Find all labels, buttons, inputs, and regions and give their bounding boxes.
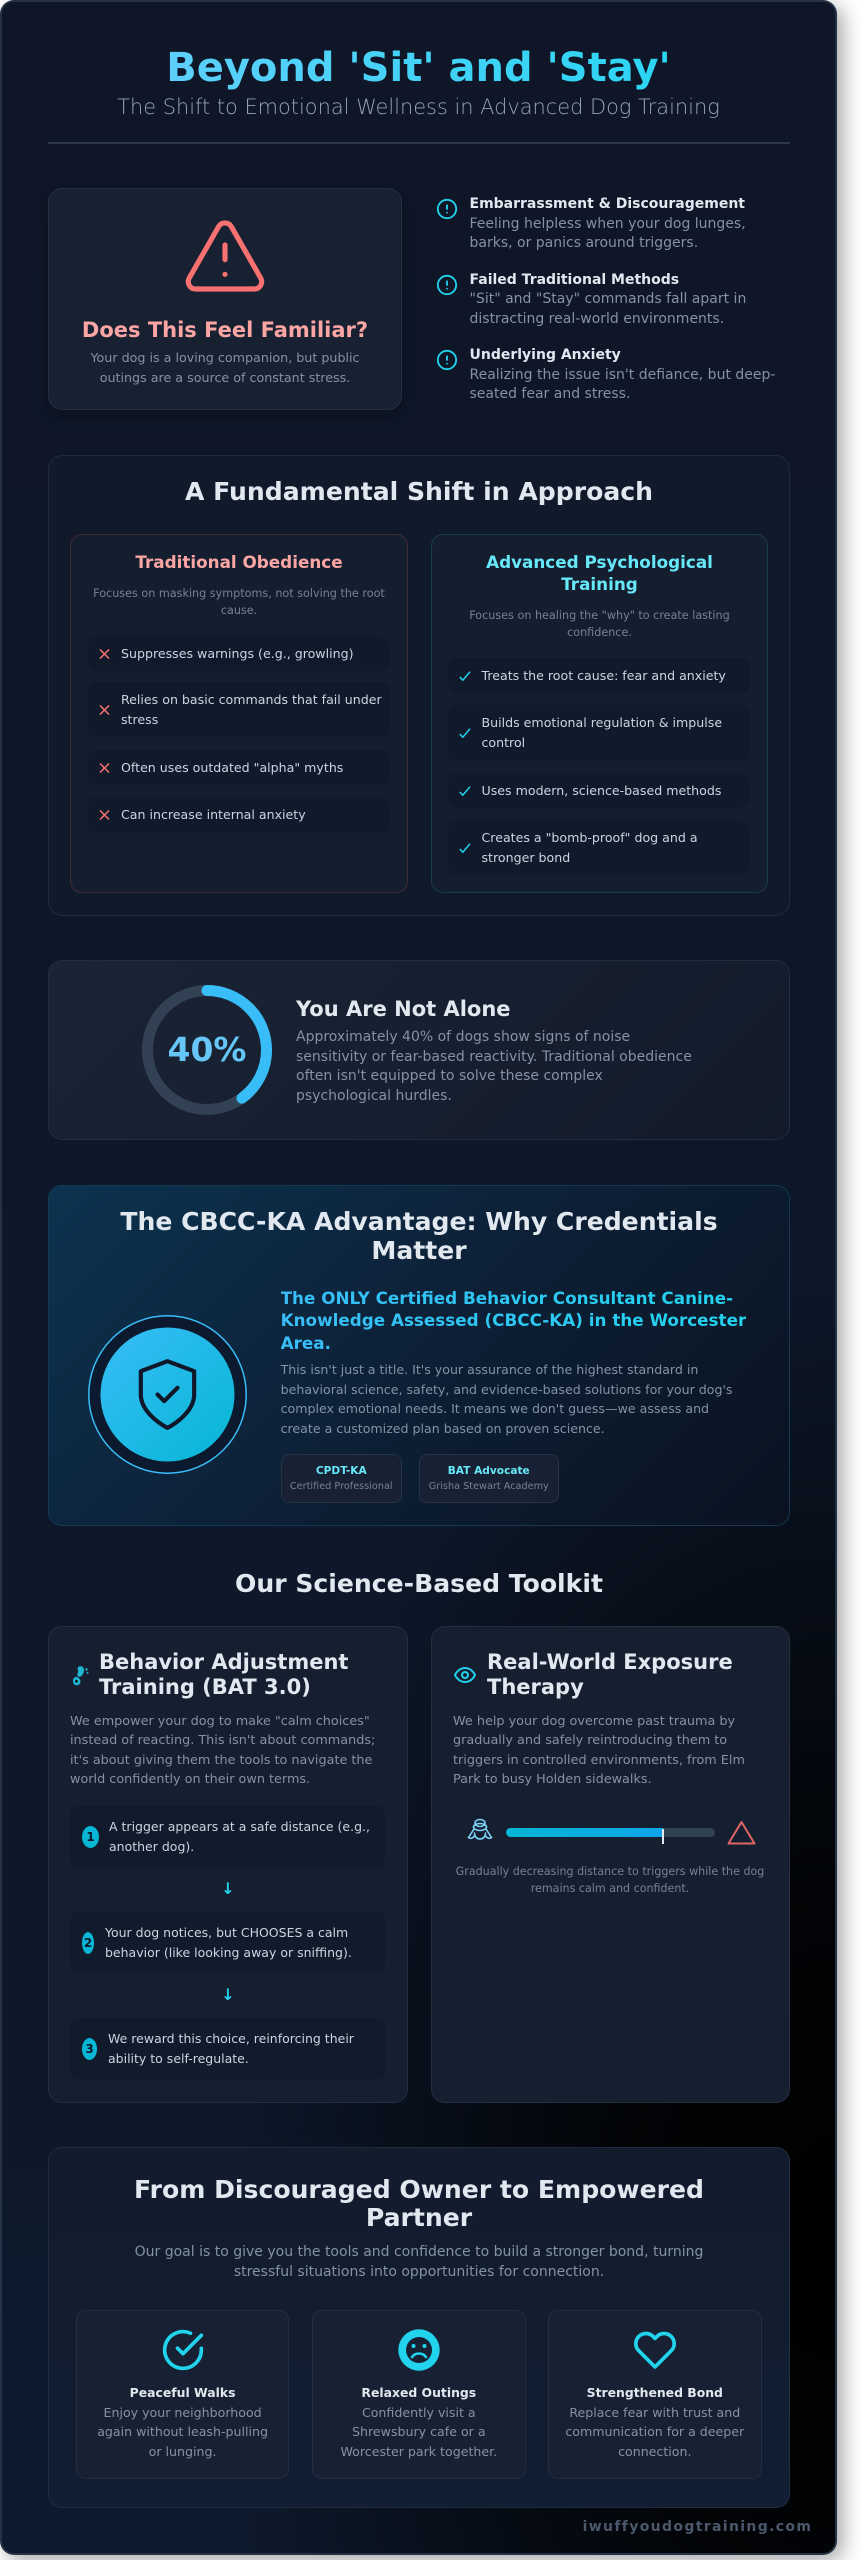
step 3: 3 — [85, 2042, 94, 2056]
heading: Matter — [371, 1236, 467, 1264]
heading — [487, 1650, 733, 1698]
item: Uses modern, science-based methods — [482, 783, 721, 798]
step 3: ability to self-regulate. — [108, 2050, 249, 2066]
item: Treats the root cause: fear and anxiety — [482, 668, 726, 683]
heading: Advanced Psychological — [486, 552, 713, 572]
item: Builds emotional regulation & impulse — [482, 715, 722, 730]
heading: The CBCC-KA Advantage: Why Credentials — [120, 1207, 718, 1236]
badge: BAT Advocate — [419, 1454, 558, 1503]
step 2: 2 — [84, 1936, 92, 1950]
heading: You Are Not Alone — [296, 997, 511, 1021]
step 2: Your dog notices, but CHOOSES a calm — [105, 1925, 348, 1940]
subtitle: The Shift to Emotional Wellness in Advanced Dog Training — [117, 95, 720, 119]
item — [88, 636, 389, 671]
point: anxiety: Underlying Anxiety — [470, 347, 621, 363]
item: Suppresses warnings (e.g., growling) — [121, 646, 354, 661]
heading: Partner — [366, 2203, 472, 2232]
panel: CBCC-KA advantage — [48, 1185, 790, 1526]
text block: triggers in controlled environments, from Elm — [453, 1752, 745, 1768]
subheading: Area. — [281, 1332, 331, 1352]
step 3 — [70, 2018, 384, 2079]
text block: Our goal is to give you the tools and confidence to build a stronger bond, turning — [135, 2244, 703, 2260]
badge: BAT Advocate: BAT Advocate — [448, 1465, 530, 1477]
heading: Training — [561, 574, 638, 594]
text block: We empower your dog to make "calm choices" — [70, 1714, 370, 1728]
item — [88, 750, 389, 785]
text block: Worcester park together. — [340, 2444, 497, 2459]
text block: world confidently on their own terms. — [70, 1772, 310, 1787]
text block: Approximately 40% of dogs show signs of noise — [296, 1029, 630, 1045]
subheading: Knowledge Assessed (CBCC-KA) in the Worcester — [281, 1310, 746, 1330]
icon: trigger triangle — [728, 1821, 756, 1844]
point: anxiety: Realizing the issue isn't defiance, but deep- — [470, 367, 775, 383]
panel: fundamental shift — [48, 455, 790, 916]
progress fill — [506, 1828, 662, 1837]
point: embarrassment: Embarrassment & Discouragement — [470, 196, 745, 212]
text block: or lunging. — [149, 2444, 216, 2459]
item: Often uses outdated "alpha" myths — [121, 760, 343, 775]
subheading — [281, 1286, 746, 1354]
icon: face — [398, 2329, 440, 2371]
text block — [90, 350, 360, 385]
item — [88, 682, 389, 737]
text block: instead of reacting. This isn't about commands; — [70, 1733, 375, 1748]
heading: From Discouraged Owner to Empowered — [134, 2175, 704, 2204]
badge: BAT Advocate: Grisha Stewart Academy — [429, 1481, 549, 1492]
text block: confidence. — [567, 626, 632, 638]
point: failed methods: "Sit" and "Stay" commands fall apart in — [470, 291, 746, 307]
icon: check circle — [162, 2330, 204, 2370]
footer url: iwuffyoudogtraining.com — [583, 2519, 812, 2535]
arrow: ↓ — [221, 1985, 235, 2004]
text block: Strengthened Bond — [587, 2385, 723, 2400]
text block: This isn't just a title. It's your assurance of the highest standard in — [281, 1362, 698, 1377]
text block: Enjoy your neighborhood — [104, 2405, 262, 2420]
point: embarrassment — [470, 196, 746, 251]
card: peaceful walks — [76, 2310, 289, 2479]
badge: CPDT-KA — [281, 1454, 402, 1503]
heading: Therapy — [487, 1674, 584, 1698]
item — [448, 820, 748, 875]
panel: real-world exposure therapy — [430, 1626, 790, 2102]
step 1: A trigger appears at a safe distance (e.g., — [109, 1819, 370, 1834]
step 1: another dog). — [109, 1839, 194, 1854]
icon: heart — [634, 2332, 676, 2369]
progress track — [506, 1828, 715, 1837]
text block — [135, 2244, 703, 2280]
panel: empowered partner — [48, 2147, 790, 2508]
text block: Focuses on masking symptoms, not solving the root — [93, 586, 385, 600]
panel: traditional obedience — [70, 534, 408, 893]
icon: alert — [436, 350, 458, 370]
item: Relies on basic commands that fail under — [121, 692, 382, 707]
title: Beyond 'Sit' and 'Stay' — [166, 45, 671, 91]
panel: does this feel familiar — [48, 188, 402, 410]
text block: it's about giving them the tools to navigate the — [70, 1752, 372, 1768]
text block: communication for a deeper — [565, 2424, 744, 2439]
text block: cause. — [221, 604, 257, 616]
text block: We help your dog overcome past trauma by — [453, 1714, 735, 1728]
icon: eye — [454, 1667, 476, 1683]
badge: CPDT-KA: CPDT-KA — [316, 1465, 367, 1477]
panel: you are not alone — [48, 960, 790, 1140]
chart: 40 percent ring: 40% — [168, 1030, 246, 1069]
caption: remains calm and confident. — [531, 1882, 689, 1894]
text block: Focuses on healing the "why" to create lasting — [469, 608, 730, 622]
icon: warning triangle — [186, 220, 264, 292]
chart: 40 percent ring — [142, 985, 272, 1115]
heading — [134, 2175, 704, 2232]
card: relaxed outings — [312, 2310, 526, 2479]
text block: behavioral science, safety, and evidence-based solutions for your dog's — [281, 1382, 732, 1397]
item — [448, 658, 748, 693]
step 2: behavior (like looking away or sniffing). — [105, 1944, 352, 1960]
step 1: 1 — [86, 1830, 95, 1844]
text block: Park to busy Holden sidewalks. — [453, 1772, 652, 1787]
heading: toolkit: Our Science-Based Toolkit — [235, 1569, 603, 1598]
panel: behavior adjustment training — [48, 1626, 408, 2102]
text block: psychological hurdles. — [296, 1088, 452, 1104]
text block: gradually and safely reintroducing them to — [453, 1733, 727, 1748]
heading: Real-World Exposure — [487, 1650, 733, 1674]
text block — [70, 1714, 375, 1787]
point: failed methods: distracting real-world environments. — [470, 311, 724, 327]
text block: Shrewsbury cafe or a — [352, 2424, 486, 2439]
marker — [662, 1829, 664, 1844]
item: Can increase internal anxiety — [121, 807, 306, 822]
text block — [340, 2385, 497, 2459]
step 2 — [70, 1912, 384, 1973]
icon: alert — [436, 198, 458, 220]
step 1 — [70, 1806, 384, 1867]
text block: Replace fear with trust and — [569, 2405, 740, 2420]
icon: paw steps — [73, 1666, 88, 1686]
heading: A Fundamental Shift in Approach — [185, 477, 653, 506]
text block — [296, 1029, 692, 1104]
heading: Does This Feel Familiar? — [82, 318, 368, 342]
text block: stressful situations into opportunities for connection. — [234, 2264, 604, 2280]
text block — [565, 2385, 744, 2459]
caption — [456, 1865, 764, 1894]
text block: outings are a source of constant stress. — [100, 370, 350, 385]
diagram: distance slider — [468, 1818, 756, 1844]
text block: complex emotional needs. It means we don't guess—we assess and — [281, 1401, 709, 1416]
point: failed methods — [470, 272, 746, 327]
heading — [99, 1650, 348, 1698]
item: Creates a "bomb-proof" dog and a — [482, 830, 698, 845]
item — [88, 797, 389, 833]
text block: create a customized plan based on proven science. — [281, 1421, 605, 1436]
heading: Traditional Obedience — [135, 552, 343, 572]
text block: again without leash-pulling — [97, 2424, 268, 2439]
icon: alert — [436, 274, 458, 296]
heading — [486, 552, 713, 594]
text block: Relaxed Outings — [361, 2385, 476, 2400]
text block — [453, 1714, 745, 1787]
heading: Behavior Adjustment — [99, 1650, 348, 1674]
list: pain points — [436, 196, 775, 402]
text block — [280, 1362, 732, 1436]
heading: Training (BAT 3.0) — [99, 1674, 311, 1698]
item: stress — [121, 712, 158, 726]
caption: Gradually decreasing distance to triggers while the dog — [456, 1865, 764, 1878]
text block: Your dog is a loving companion, but public — [90, 350, 360, 365]
icon: shield badge — [88, 1315, 247, 1474]
text block: Confidently visit a — [362, 2405, 476, 2420]
arrow: ↓ — [221, 1879, 235, 1898]
item: control — [482, 735, 525, 750]
point: anxiety: seated fear and stress. — [470, 386, 630, 402]
panel: advanced psychological training — [431, 534, 768, 893]
card: strengthened bond — [548, 2310, 762, 2479]
text block: often isn't equipped to solve these complex — [296, 1068, 603, 1084]
text block — [469, 608, 730, 638]
step 3: We reward this choice, reinforcing their — [108, 2031, 354, 2046]
subheading: The ONLY Certified Behavior Consultant Canine- — [281, 1288, 733, 1308]
point: anxiety — [470, 347, 775, 402]
text block — [93, 586, 385, 616]
icon: dog — [468, 1818, 492, 1840]
badge: CPDT-KA: Certified Professional — [290, 1481, 393, 1492]
text block: connection. — [618, 2444, 692, 2459]
item — [448, 705, 748, 761]
heading — [120, 1207, 718, 1264]
point: failed methods: Failed Traditional Methods — [470, 272, 679, 288]
point: embarrassment: Feeling helpless when your dog lunges, — [470, 216, 746, 232]
text block: sensitivity or fear-based reactivity. Traditional obedience — [296, 1049, 692, 1065]
title — [0, 40, 837, 96]
item — [448, 773, 748, 808]
point: embarrassment: barks, or panics around triggers. — [470, 235, 698, 251]
text block — [97, 2385, 268, 2459]
text block: Peaceful Walks — [130, 2385, 236, 2400]
item: stronger bond — [482, 850, 570, 864]
